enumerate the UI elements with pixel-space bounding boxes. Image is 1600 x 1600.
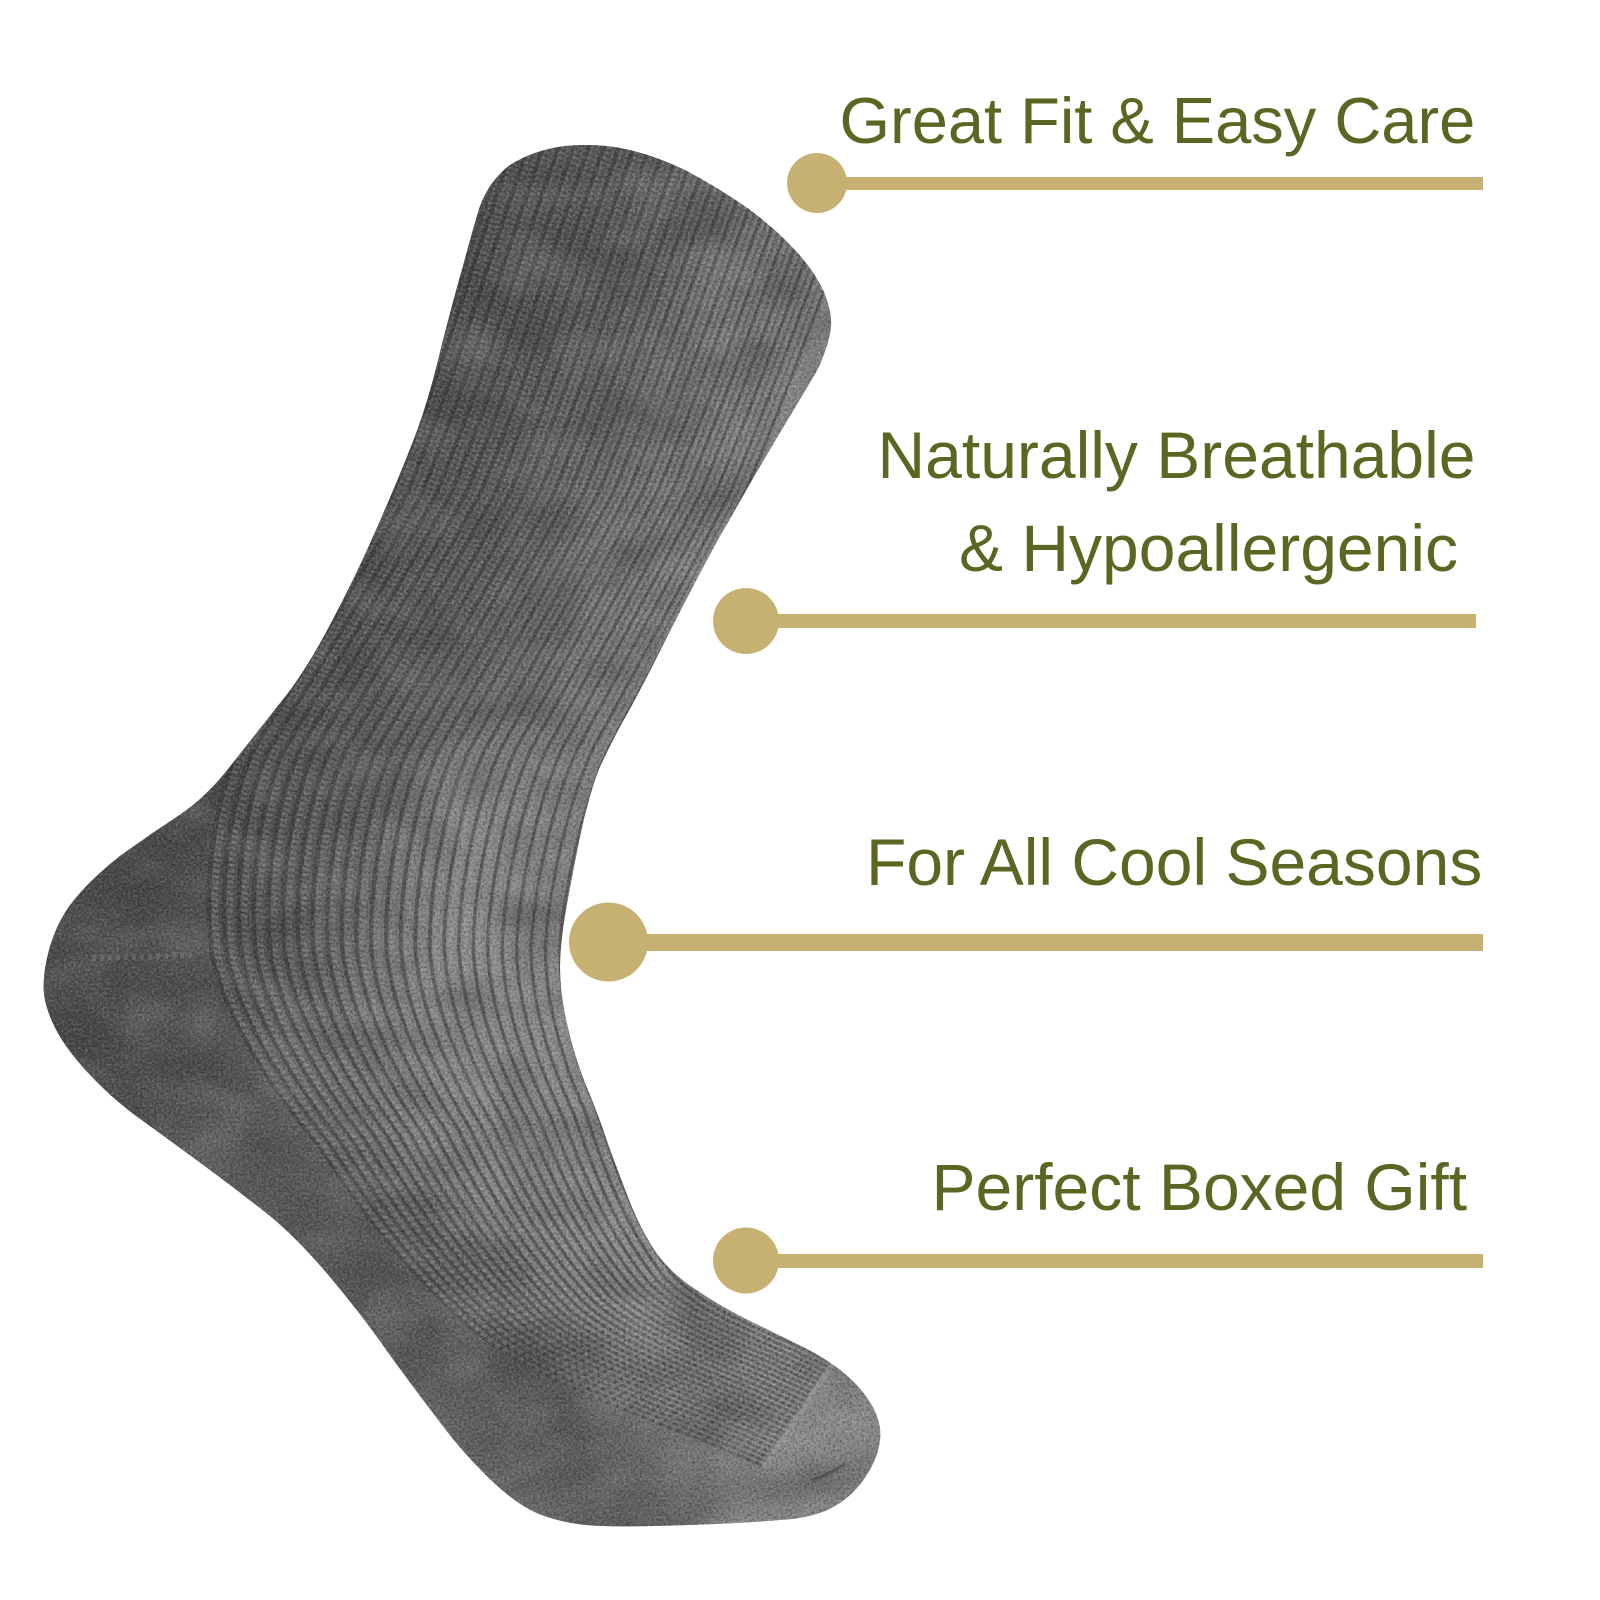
callout: for all cool seasons [569,825,1483,982]
lower foot tone [739,1492,792,1523]
callout: naturally breathable and hypoallergenic [713,418,1476,654]
dark shadow on rear of leg [44,145,682,1170]
rib highlights [212,146,828,1469]
leader line [630,934,1483,951]
toe seam [763,1363,833,1467]
heel shadow [44,885,88,970]
leader line [760,1254,1483,1268]
sock illustration [44,145,880,1526]
ankle highlight [380,755,530,1018]
heading: For All Cool Seasons [866,825,1482,899]
marker dot [713,1228,779,1294]
leader line [835,177,1483,190]
marker dot [713,588,779,654]
heel seam [92,955,195,958]
callout: perfect boxed gift [713,1150,1483,1294]
heading: Great Fit & Easy Care [840,84,1475,157]
callout: great fit and easy care [787,84,1483,213]
sock body [44,145,880,1526]
sock shading, ribs and knit texture [44,145,880,1526]
leader line [760,614,1476,628]
fine upper-leg ribs [240,145,820,826]
marker dot [569,902,648,982]
dark knit texture [44,145,880,1526]
light knit texture [44,145,880,1526]
marker dot [787,153,847,213]
dark wool mottling [126,146,877,1526]
toe highlight [840,1386,880,1502]
light wool mottling [47,146,830,1524]
rib grooves [206,145,830,1467]
heading line one: Naturally Breathable [878,418,1476,492]
heading line two: & Hypoallergenic [959,511,1458,585]
heading: Perfect Boxed Gift [932,1150,1467,1224]
sole shadow [189,1092,720,1526]
toe fold [812,1464,845,1480]
